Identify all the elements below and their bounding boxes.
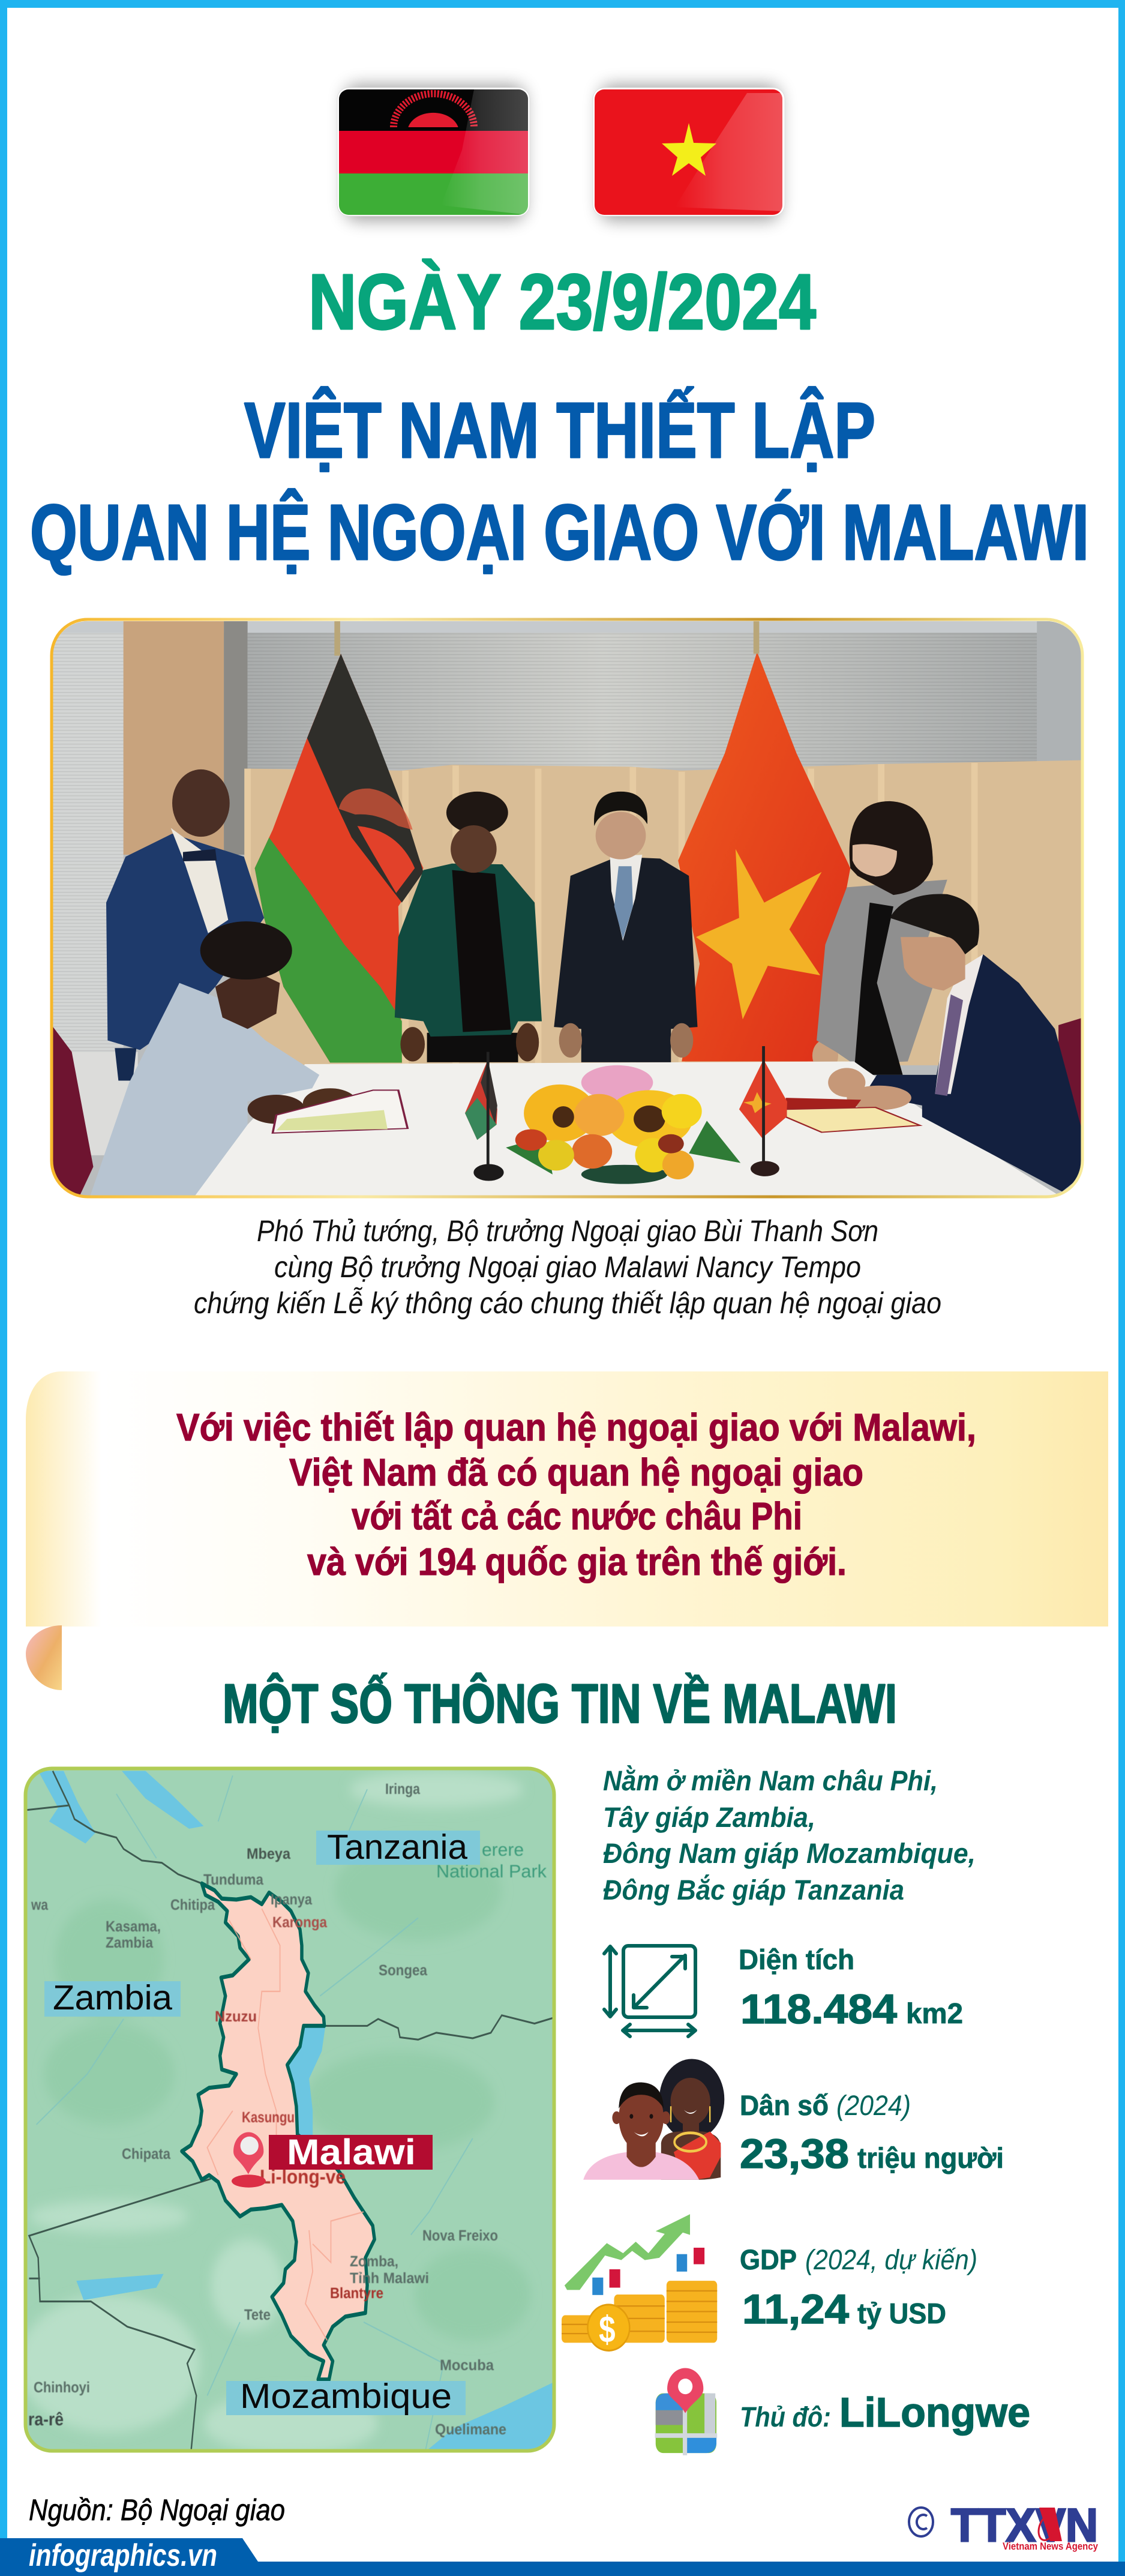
- icon: GDP coins and arrow: $: [599, 2309, 616, 2350]
- small map labels: National Park: [436, 1862, 547, 1882]
- small map labels: Nzuzu: [215, 2008, 257, 2025]
- documents: [272, 1090, 407, 1133]
- footer band: [0, 2538, 1125, 2576]
- small map labels: Quelimane: [435, 2421, 506, 2438]
- folding screen: [248, 760, 1084, 1065]
- banner text: với tất cả các nước châu Phi: [352, 1494, 802, 1538]
- icon: map pin: [232, 2132, 266, 2188]
- stat: GDP: GDP: [740, 2243, 797, 2275]
- callout banner: [26, 1371, 1108, 1690]
- small map labels: Zomba,: [350, 2253, 398, 2270]
- stat: area: km2: [906, 1998, 963, 2030]
- stat: GDP: tỷ USD: [857, 2298, 946, 2330]
- standing man center: [554, 856, 698, 1062]
- stat: population: triệu người: [857, 2143, 1004, 2174]
- small map labels: Chinhoyi: [34, 2379, 90, 2396]
- title date: NGÀY 23/9/2024: [308, 257, 816, 346]
- small map labels: Ipanya: [271, 1891, 313, 1908]
- banner curl: [26, 1625, 62, 1690]
- location description: Tây giáp Zambia,: [603, 1801, 815, 1833]
- stat: population: (2024): [836, 2089, 911, 2121]
- flag: Vietnam: [593, 85, 785, 220]
- seated woman left: [90, 983, 319, 1197]
- small map labels: Mbeya: [247, 1846, 291, 1862]
- photo caption: [194, 1214, 941, 1320]
- label: Zambia: Zambia: [53, 1978, 173, 2017]
- photo caption: Phó Thủ tướng, Bộ trưởng Ngoại giao Bùi Thanh Sơn: [257, 1214, 878, 1248]
- small map labels: Zambia: [106, 1934, 154, 1951]
- stat: capital: [740, 2389, 1030, 2436]
- small map labels: Nova Freixo: [422, 2227, 498, 2244]
- small map labels: Tỉnh Malawi: [350, 2270, 429, 2287]
- label: Malawi: Malawi: [287, 2132, 416, 2172]
- small map labels: [28, 1781, 547, 2438]
- logo: TTXVN: Vietnam News Agency: [1003, 2541, 1098, 2552]
- table: [194, 1062, 1062, 1197]
- location description: Nằm ở miền Nam châu Phi,: [603, 1765, 938, 1796]
- location description: [603, 1765, 976, 1906]
- small map labels: Blantyre: [330, 2285, 383, 2302]
- stat: area: [739, 1943, 963, 2032]
- location description: Đông Nam giáp Mozambique,: [603, 1837, 976, 1869]
- source note: Nguồn: Bộ Ngoại giao: [29, 2493, 285, 2527]
- photo caption: cùng Bộ trưởng Ngoại giao Malawi Nancy Tempo: [274, 1250, 861, 1284]
- table flags: [465, 1059, 497, 1140]
- icon: yellow star: [662, 123, 716, 176]
- stat: population: Dân số: [740, 2089, 829, 2121]
- icon: people: [583, 2059, 724, 2180]
- stat: GDP: (2024, dự kiến): [805, 2243, 977, 2275]
- banner text: Việt Nam đã có quan hệ ngoại giao: [289, 1451, 863, 1494]
- small map labels: Karonga: [272, 1914, 328, 1931]
- stat: area: Diện tích: [739, 1943, 854, 1975]
- small map labels: Tunduma: [203, 1871, 264, 1888]
- small map labels: Kasungu: [242, 2109, 295, 2126]
- small map labels: Li-long-ve: [260, 2165, 346, 2188]
- country borders: [27, 1771, 553, 2453]
- standing man left: [106, 834, 264, 1050]
- Malawi flag: [255, 654, 424, 1062]
- map panel: [18, 1767, 556, 2455]
- stat: area: 118.484: [740, 1986, 897, 2032]
- small map labels: wa: [31, 1897, 49, 1913]
- water bodies: [38, 1771, 554, 2453]
- stat: capital: LiLongwe: [839, 2389, 1030, 2436]
- seated man right: [865, 954, 1084, 1191]
- flags: [337, 85, 785, 220]
- icon: area: [604, 1946, 695, 2036]
- flag: Malawi: [337, 85, 530, 220]
- icon: GDP coins and arrow: [562, 2214, 717, 2350]
- small map labels: Tete: [244, 2307, 271, 2323]
- stat: GDP: [740, 2243, 977, 2332]
- small map labels: Chitipa: [170, 1897, 215, 1913]
- small map labels: Kasama,: [106, 1918, 161, 1935]
- stat: capital: Thủ đô:: [740, 2401, 831, 2433]
- chairs: [52, 1025, 93, 1197]
- small map labels: Chipata: [122, 2146, 171, 2162]
- flower bouquet: [581, 1165, 667, 1184]
- stat: population: 23,38: [740, 2131, 849, 2177]
- small map labels: Mocuba: [440, 2357, 494, 2374]
- small map labels: Iringa: [385, 1781, 421, 1798]
- standing woman in green: [427, 1033, 518, 1062]
- website: infographics.vn: [29, 2538, 217, 2573]
- icon: capital map pin: [655, 2368, 717, 2455]
- small map labels: erere: [482, 1840, 524, 1860]
- rivers: [37, 1775, 473, 2451]
- section heading: MỘT SỐ THÔNG TIN VỀ MALAWI: [223, 1673, 897, 1735]
- photo caption: chứng kiến Lễ ký thông cáo chung thiết lập quan hệ ngoại giao: [194, 1286, 941, 1320]
- banner text: [176, 1406, 976, 1583]
- photo: signing ceremony: [50, 619, 1087, 1197]
- small map labels: ra-rê: [28, 2410, 64, 2430]
- Vietnam flag: [678, 652, 850, 1062]
- stat: GDP: 11,24: [742, 2286, 849, 2332]
- location description: Đông Bắc giáp Tanzania: [603, 1874, 904, 1906]
- title line 1: VIỆT NAM THIẾT LẬP: [244, 386, 875, 474]
- stat: population: [740, 2089, 1004, 2177]
- banner text: và với 194 quốc gia trên thế giới.: [307, 1540, 847, 1583]
- label: Tanzania: Tanzania: [327, 1828, 468, 1867]
- label: Mozambique: Mozambique: [240, 2377, 452, 2416]
- small map labels: Songea: [379, 1962, 428, 1979]
- standing woman right: [812, 1042, 838, 1062]
- logo: TTXVN: TTXVN: [951, 2499, 1098, 2551]
- Malawi outline: [182, 1883, 374, 2380]
- banner text: Với việc thiết lập quan hệ ngoại giao với Malawi,: [176, 1406, 976, 1449]
